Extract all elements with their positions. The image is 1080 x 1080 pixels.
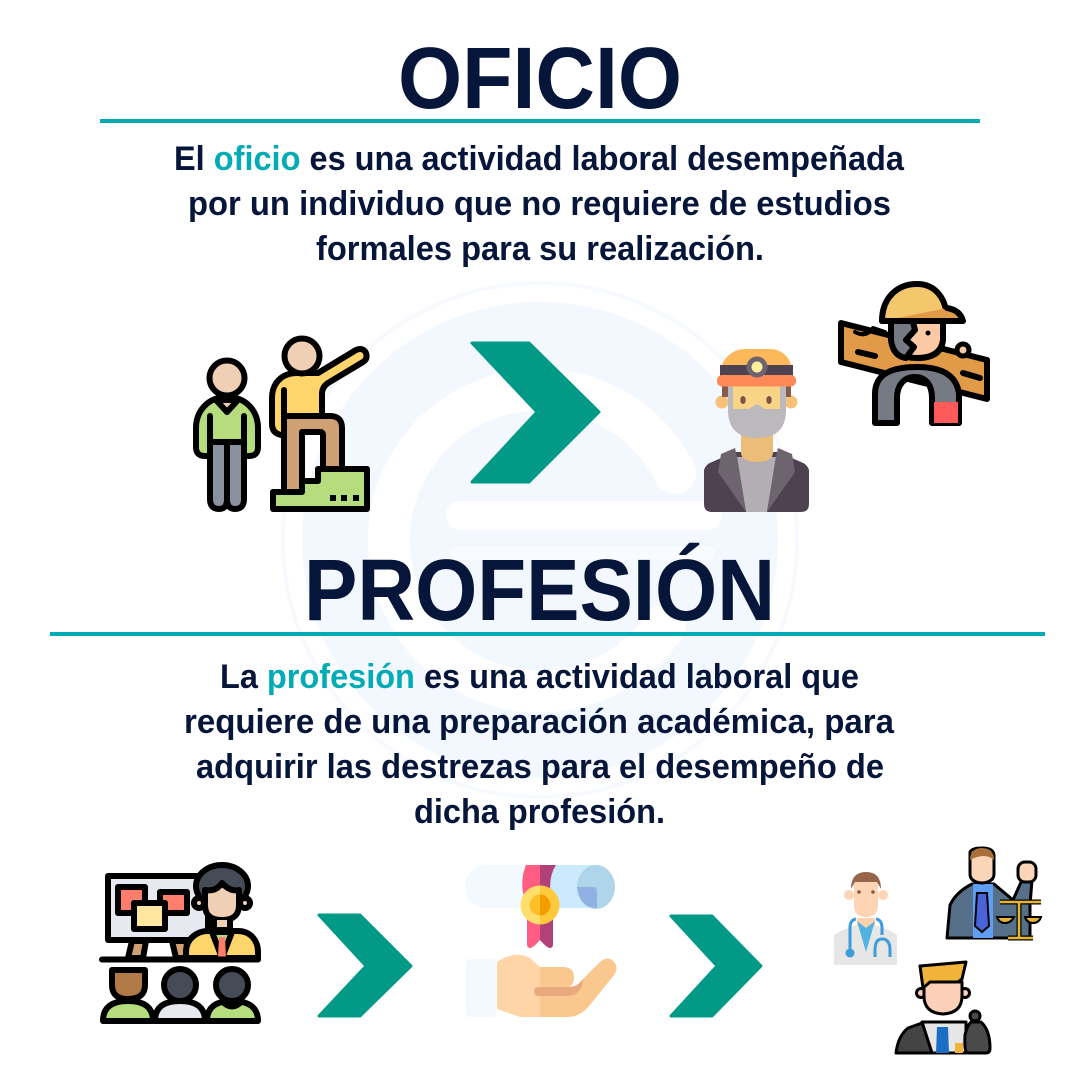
icon: diploma and hand <box>465 865 616 1017</box>
arrow: oficio <box>472 343 599 482</box>
icon: doctor <box>834 872 897 965</box>
left man <box>196 360 258 509</box>
text block: profesión definition: dicha profesión. <box>414 793 665 831</box>
hand <box>466 955 616 1017</box>
text block: profesión definition: requiere de una preparación académica, para <box>184 703 895 741</box>
floor line <box>102 956 258 962</box>
arrow: study to degree <box>319 915 411 1016</box>
watermark logo <box>283 283 797 797</box>
icon: step dots <box>330 495 359 501</box>
text block: oficio definition: El oficio es una actividad laboral desempeñada <box>174 140 905 178</box>
title: oficio: OFICIO <box>398 30 682 127</box>
right man <box>272 338 367 492</box>
arrow: degree to professions <box>671 916 761 1016</box>
text block: profesión definition <box>184 658 895 831</box>
text block: oficio definition: formales para su realización. <box>316 230 764 268</box>
title: profesión: PROFESIÓN <box>304 542 775 639</box>
text block: oficio definition: por un individuo que no requiere de estudios <box>188 185 891 223</box>
students <box>103 969 258 1021</box>
divider: profesión <box>50 632 1045 636</box>
icon: worker carrying wood <box>841 284 987 423</box>
text block: oficio definition <box>174 140 905 268</box>
text block: profesión definition: adquirir las destrezas para el desempeño de <box>196 748 884 786</box>
icon: businessman with money bag <box>896 962 990 1053</box>
divider: oficio <box>100 119 980 123</box>
diploma scroll <box>465 865 615 909</box>
steps <box>273 469 367 509</box>
icon: miner <box>704 349 809 512</box>
icon: classroom teacher and students <box>102 865 258 1021</box>
text block: profesión definition: La profesión es una actividad laboral que <box>220 658 859 696</box>
icon: lawyer with scales <box>947 848 1041 938</box>
icon: two men on steps <box>196 338 367 509</box>
teacher <box>186 865 258 958</box>
board <box>108 876 208 958</box>
ribbon and medal <box>520 865 560 948</box>
